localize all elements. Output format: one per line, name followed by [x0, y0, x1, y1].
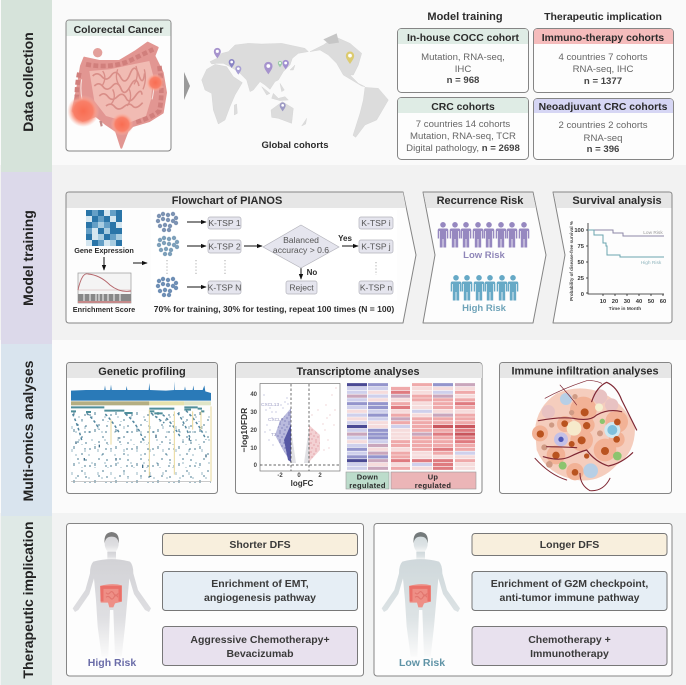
chart: volcano plot: 2: [318, 473, 322, 479]
box: enrichment of EMT: Enrichment of EMT,: [211, 578, 309, 590]
panel: neoadjuvant CRC cohorts: Neoadjuvant CRC cohorts: [539, 102, 668, 113]
panel: data collection tab: Data collection: [20, 32, 36, 132]
map: africa: [202, 64, 242, 124]
panel: immuno-therapy cohorts: 4 countries 7 cohorts: [558, 52, 648, 63]
panel: immuno-therapy cohorts: RNA-seq, IHC: [573, 64, 633, 75]
box: chemotherapy immunotherapy: Immunotherapy: [530, 648, 609, 660]
box: enrichment of EMT: angiogenesis pathway: [204, 592, 316, 604]
label: down regulated: regulated: [349, 481, 386, 490]
chart: volcano plot: CXCL13: [261, 402, 279, 408]
panel: immuno-therapy cohorts: [534, 28, 674, 92]
chart: volcano plot: 0: [297, 473, 301, 479]
text: training split: 70% for training, 30% for testing, repeat 100 times (N = 100): [154, 304, 394, 314]
text: global cohorts: Global cohorts: [261, 140, 329, 151]
arrow: expression to enrichment: [103, 257, 105, 270]
panel: transcriptome analyses: [236, 362, 482, 494]
chart: survival curves: 100: [574, 228, 584, 234]
cell clusters: [156, 212, 376, 297]
box: enrichment of G2M: Enrichment of G2M checkpoint,: [491, 578, 648, 590]
panel: CRC cohorts: CRC cohorts: [431, 102, 495, 113]
panel: flowchart of PIANOS: [66, 192, 416, 323]
panel: neoadjuvant CRC cohorts: RNA-seq: [584, 133, 622, 144]
classifier boxes: Reject: [289, 282, 314, 292]
label: down regulated: [346, 472, 389, 490]
panel: genetic profiling: Genetic profiling: [98, 366, 186, 378]
chart: survival curves: Time in Month: [609, 306, 641, 312]
chart: survival curves: 10: [600, 299, 606, 305]
classifier boxes: K-TSP N: [208, 282, 241, 292]
chart: oncoplot: [71, 381, 211, 483]
panel: in-house COCC cohort: Mutation, RNA-seq,: [421, 52, 505, 63]
label: up regulated: Up: [428, 472, 438, 482]
panel: in-house COCC cohort: In-house COCC cohort: [407, 33, 520, 44]
chart: survival curves: [569, 221, 666, 312]
chart: heatmap: [347, 385, 475, 468]
illustration: colon: [67, 43, 166, 148]
panel: survival analysis: [553, 192, 672, 323]
panel: multi-omics tab: [1, 344, 52, 516]
panel: recurrence risk: [423, 192, 546, 323]
panel: therapeutic tab: [1, 516, 52, 685]
panel: recurrence risk: Recurrence Risk: [437, 195, 524, 207]
panel: in-house COCC cohort: n = 968: [447, 75, 480, 86]
label: low risk: Low Risk: [463, 250, 506, 261]
chart: survival curves: 20: [612, 299, 618, 305]
map pins: [214, 48, 354, 111]
chart: survival curves: 75: [578, 244, 585, 250]
label: low risk: Low Risk: [399, 657, 445, 669]
box: chemotherapy immunotherapy: [472, 626, 667, 666]
arrow: input to samples: [133, 262, 147, 264]
chart: survival curves: Low Risk: [643, 230, 663, 236]
chart: volcano plot: 30: [250, 410, 258, 416]
chart: volcano plot: [239, 384, 340, 488]
box: aggressive chemotherapy: [162, 626, 358, 666]
box: shorter DFS: [162, 534, 358, 556]
label: down regulated: Down: [357, 472, 378, 482]
chart: volcano plot: 0: [254, 463, 258, 469]
decision diamond: [263, 225, 339, 268]
panel: in-house COCC cohort: [398, 28, 528, 92]
chart: survival curves: 50: [648, 299, 654, 305]
chart: volcano plot: −log10FDR: [239, 408, 249, 452]
panel: survival analysis: Survival analysis: [572, 195, 662, 207]
panel: neoadjuvant CRC cohorts: [534, 98, 674, 160]
label: yes: Yes: [338, 234, 352, 243]
chart: enrichment score: [78, 273, 131, 303]
panel: low risk therapy: [374, 524, 672, 676]
panel: immuno-therapy cohorts: n = 1377: [584, 76, 622, 87]
chart: survival curves: 25: [578, 276, 585, 282]
map: arctic islands: [323, 33, 339, 44]
panel: CRC cohorts: Digital pathology, n = 2698: [406, 143, 521, 154]
label: up regulated: [391, 472, 476, 490]
chart: survival curves: 50: [578, 260, 584, 266]
map: eurasia: [210, 43, 308, 92]
panel: multi-omics tab: Multi-omics analyses: [20, 360, 36, 501]
box: aggressive chemotherapy: Bevacizumab: [226, 648, 294, 660]
panel: immuno-therapy cohorts: Immuno-therapy cohorts: [542, 33, 664, 44]
classifier boxes: K-TSP i: [361, 218, 391, 228]
classifier boxes: K-TSP 2: [208, 242, 241, 252]
heading: colorectal cancer: Colorectal Cancer: [74, 24, 163, 36]
chart: survival curves: High Risk: [641, 260, 662, 266]
heatmap: gene expression: [86, 210, 122, 246]
map: south america: [353, 87, 388, 137]
heading: therapeutic implication: Therapeutic implication: [544, 11, 662, 23]
label: up regulated: regulated: [415, 481, 451, 490]
classifier boxes: [208, 217, 393, 294]
chart: volcano plot: logFC: [291, 479, 314, 488]
panel: CRC cohorts: [398, 98, 528, 160]
panel: CRC cohorts: Mutation, RNA-seq, TCR: [410, 131, 516, 142]
icon: human body high risk: [73, 532, 151, 657]
map: australia and islands: [234, 65, 307, 126]
panel: therapeutic tab: Therapeutic implication: [20, 521, 36, 679]
box: enrichment of G2M: [472, 572, 667, 610]
chart: survival curves: Probability of disease-free survival %: [569, 221, 574, 301]
box: enrichment of G2M: anti-tumor immune pathway: [499, 592, 640, 604]
box: shorter DFS: Shorter DFS: [229, 539, 291, 551]
label: enrichment score: Enrichment Score: [73, 305, 135, 314]
panel: immune infiltration analyses: Immune infiltration analyses: [511, 366, 659, 378]
chart: volcano plot: 10: [250, 446, 258, 452]
panel: immune infiltration analyses: [500, 362, 672, 494]
world map: [202, 33, 388, 137]
chart: volcano plot: CXCL9: [268, 417, 284, 423]
chart: survival curves: 40: [636, 299, 642, 305]
heading: model training: Model training: [427, 11, 503, 23]
box: chemotherapy immunotherapy: Chemotherapy +: [528, 634, 611, 646]
panel: transcriptome analyses: Transcriptome analyses: [296, 366, 420, 378]
panel: CRC cohorts: 7 countries 14 cohorts: [416, 119, 510, 130]
panel: colorectal cancer: [66, 20, 171, 151]
panel: genetic profiling: [66, 362, 218, 494]
box: longer DFS: [472, 534, 667, 556]
panel: model training tab: Model training: [20, 210, 36, 306]
box: enrichment of EMT: [162, 572, 358, 610]
classifier boxes: K-TSP 1: [208, 218, 241, 228]
illustration: tumor microenvironment: [532, 381, 637, 491]
panel: in-house COCC cohort: IHC: [455, 64, 471, 75]
box: longer DFS: Longer DFS: [540, 539, 599, 551]
panel: high risk therapy: [66, 524, 364, 676]
panel: neoadjuvant CRC cohorts: n = 396: [587, 144, 619, 155]
label: no: No: [307, 268, 317, 277]
box: aggressive chemotherapy: Aggressive Chemotherapy+: [190, 634, 330, 646]
decision diamond: accuracy > 0.6: [273, 245, 329, 255]
map: north america: [310, 37, 365, 87]
heading: flowchart: Flowchart of PIANOS: [172, 195, 282, 207]
chart: volcano plot: 40: [250, 392, 258, 398]
classifier boxes: K-TSP n: [360, 282, 392, 292]
classifier boxes: K-TSP j: [361, 242, 391, 252]
chart: survival curves: 0: [581, 292, 584, 298]
chart: survival curves: 60: [660, 299, 666, 305]
label: high risk: High Risk: [462, 303, 507, 314]
label: gene expression: Gene Expression: [74, 246, 134, 255]
icons: high risk people: [451, 275, 518, 300]
arrows: clusters to classifiers: [187, 222, 358, 287]
arrow: chevron to map: [184, 72, 190, 100]
label: high risk: High Risk: [88, 657, 136, 669]
chart: volcano plot: 20: [250, 428, 258, 434]
icons: low risk people: [438, 222, 529, 248]
decision diamond: Balanced: [283, 235, 319, 245]
chart: survival curves: 30: [624, 299, 630, 305]
panel: data collection tab: [1, 0, 52, 172]
chart: volcano plot: -2: [277, 473, 283, 479]
panel: model training tab: [1, 172, 52, 344]
panel: neoadjuvant CRC cohorts: 2 countries 2 cohorts: [558, 120, 648, 131]
chart: volcano plot: T3: [271, 432, 277, 438]
icon: human body low risk: [382, 532, 460, 657]
